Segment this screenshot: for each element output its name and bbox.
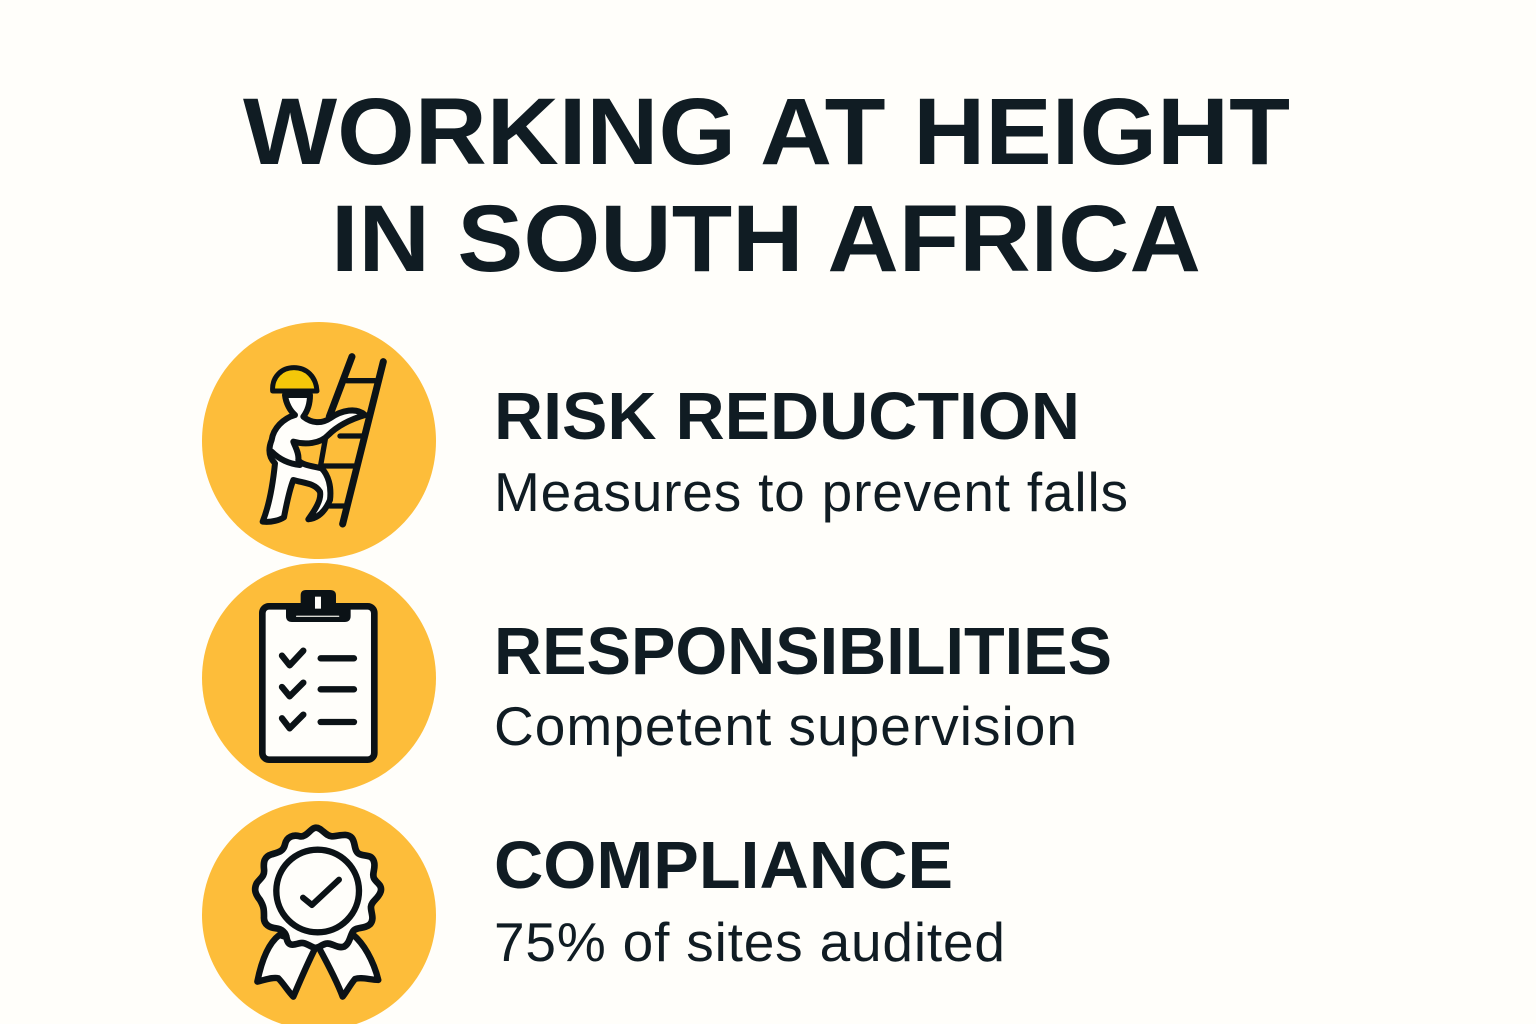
icon: worker climbing ladder: [202, 322, 436, 559]
check: [303, 880, 339, 905]
heading: responsibilities: RESPONSIBILITIES: [494, 614, 1112, 689]
worker body: [263, 395, 365, 522]
text: competent supervision: Competent supervision: [494, 695, 1077, 757]
helmet: [273, 368, 317, 391]
heading: risk reduction: RISK REDUCTION: [494, 379, 1080, 454]
text: 75% of sites audited: 75% of sites audited: [494, 911, 1005, 973]
title: IN SOUTH AFRICA: [331, 186, 1201, 292]
ribbons: [257, 935, 316, 997]
panel: risk reduction: [202, 322, 1128, 559]
icon: clipboard checklist: [202, 563, 436, 793]
heading: compliance: COMPLIANCE: [494, 828, 953, 903]
seal: [255, 828, 381, 948]
panel: compliance: [202, 801, 1005, 1024]
panel: responsibilities: [202, 563, 1112, 793]
title: [243, 79, 1290, 292]
text: measures to prevent falls: Measures to prevent falls: [494, 461, 1128, 523]
ladder: [321, 357, 383, 524]
icon: award rosette: [202, 801, 436, 1024]
title: WORKING AT HEIGHT: [243, 79, 1290, 185]
